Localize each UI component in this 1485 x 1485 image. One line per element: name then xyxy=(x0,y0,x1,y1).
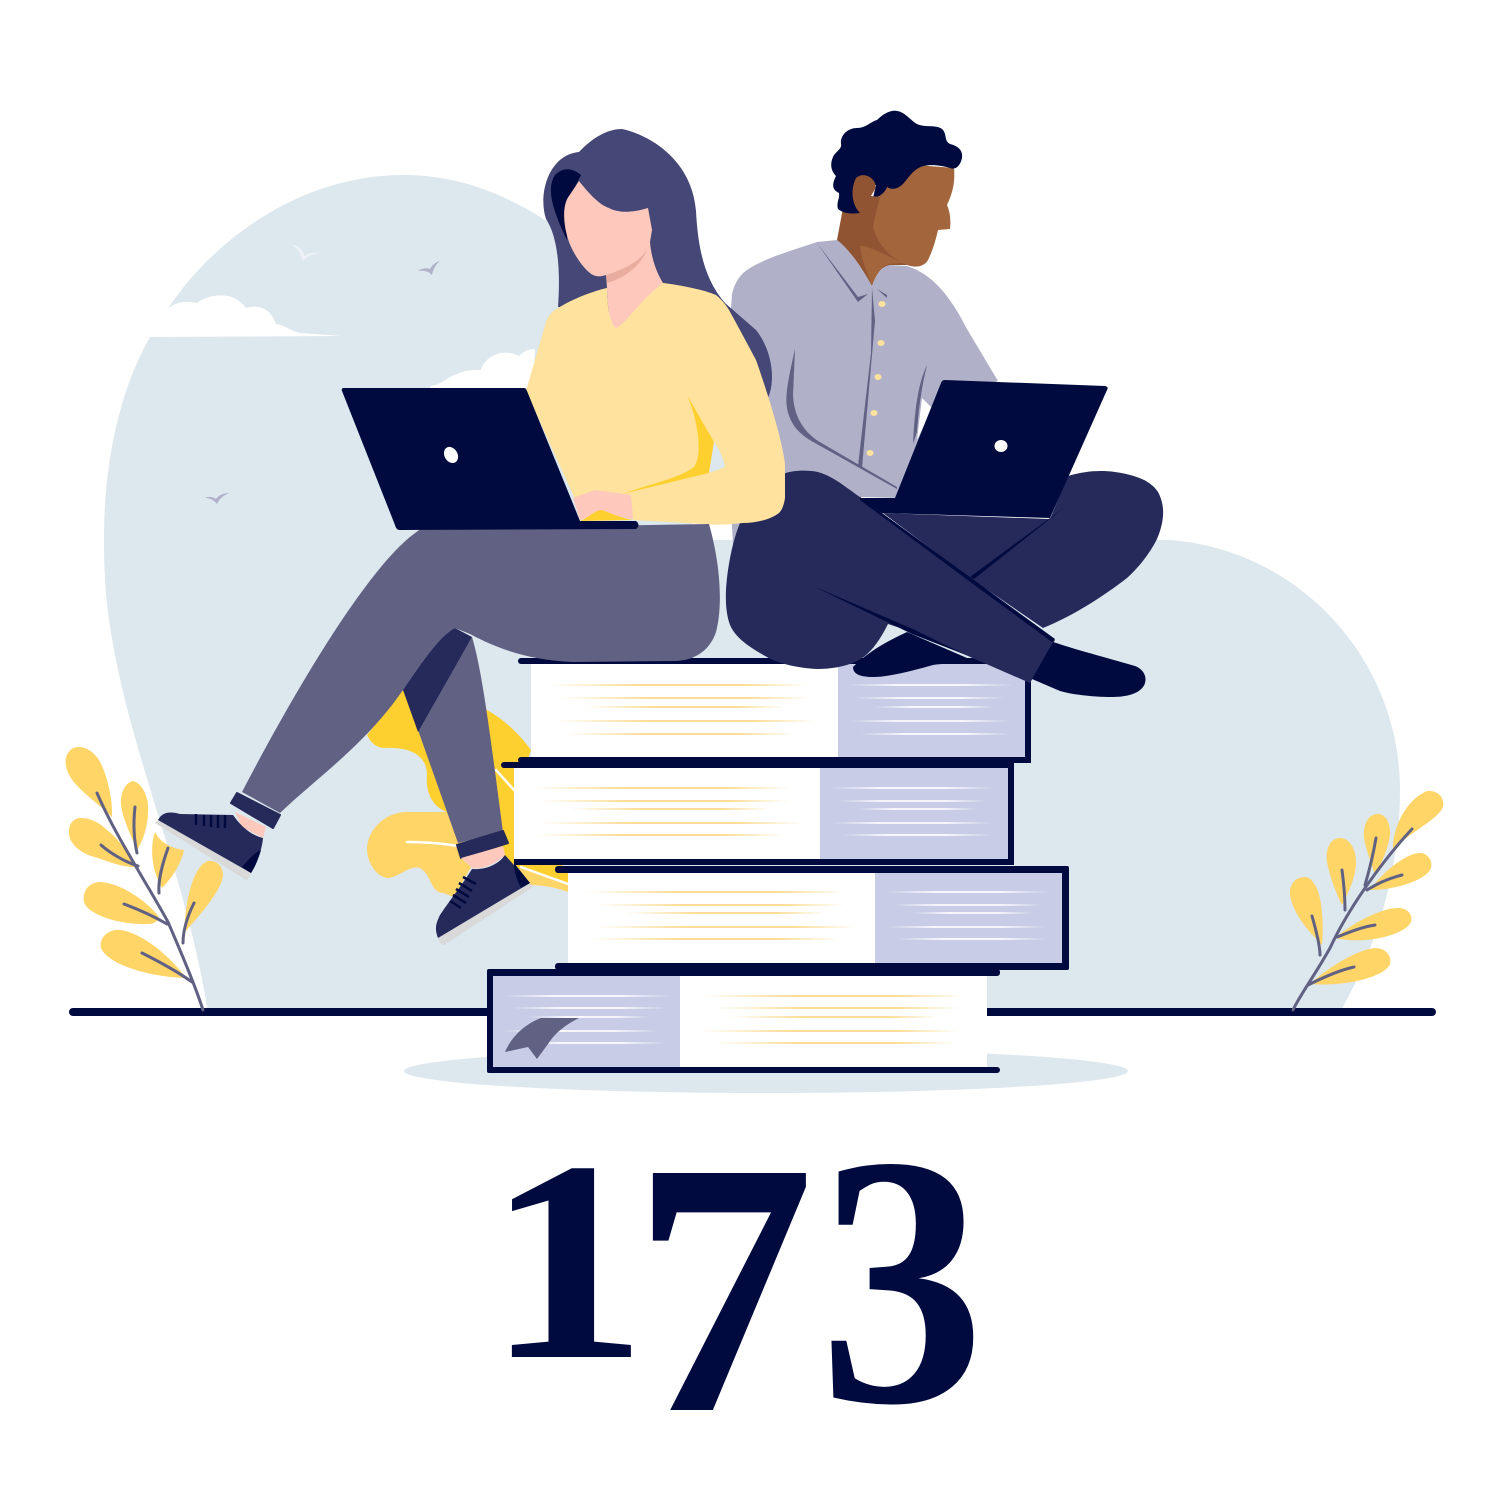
woman back leg xyxy=(418,637,503,843)
digit 1: 1 xyxy=(486,1103,648,1420)
background blob xyxy=(104,175,1400,1012)
man ear xyxy=(853,175,880,225)
gap under arm xyxy=(917,398,932,440)
woman xyxy=(155,129,785,945)
shoe right xyxy=(436,846,533,945)
cuff 2 xyxy=(457,831,508,858)
book 1 xyxy=(518,658,1031,763)
bookmark xyxy=(505,1018,579,1059)
shoe left xyxy=(155,812,266,880)
far leg xyxy=(883,471,1163,628)
bird 2 xyxy=(418,261,440,275)
near leg xyxy=(726,471,1055,683)
yellow bush behind legs xyxy=(367,690,568,897)
man hair xyxy=(831,111,962,214)
plant right xyxy=(1290,791,1443,1010)
cloud behind laptop xyxy=(430,349,535,388)
yellow under hand xyxy=(580,510,633,521)
ground shadow xyxy=(404,1049,1128,1093)
man laptop xyxy=(860,380,1108,518)
cuff 1 xyxy=(231,793,280,828)
woman front leg xyxy=(242,524,720,813)
book stack xyxy=(487,658,1069,1073)
bird 3 xyxy=(205,493,229,504)
man neck xyxy=(837,197,907,286)
digit 3: 3 xyxy=(819,1082,985,1479)
hair dark inner xyxy=(551,169,581,240)
woman hair xyxy=(543,129,772,398)
digit 7: 7 xyxy=(632,1088,815,1485)
man xyxy=(725,111,1163,697)
neck highlight xyxy=(860,246,903,285)
hand xyxy=(573,490,633,520)
sweater dark fold xyxy=(622,395,714,494)
woman laptop xyxy=(342,388,638,530)
gap between arm and body xyxy=(709,442,725,473)
far foot xyxy=(853,632,967,677)
ground line xyxy=(69,1008,1436,1016)
man shirt xyxy=(725,240,998,545)
near foot xyxy=(1032,642,1146,697)
man face xyxy=(873,165,954,267)
woman sweater xyxy=(526,283,785,525)
book 2 xyxy=(501,762,1014,865)
shirt buttons xyxy=(866,301,886,456)
book 3 xyxy=(555,866,1069,970)
cloud left xyxy=(150,295,341,337)
trouser fold lines xyxy=(813,497,1065,655)
woman face and neck xyxy=(564,181,663,330)
bird 1 xyxy=(292,245,320,261)
neck shadow xyxy=(606,249,647,283)
plant left xyxy=(66,747,223,1010)
shirt folds xyxy=(786,243,927,489)
number 173 xyxy=(486,1082,985,1485)
book 4 xyxy=(487,969,1000,1073)
knee shadow xyxy=(403,628,472,732)
